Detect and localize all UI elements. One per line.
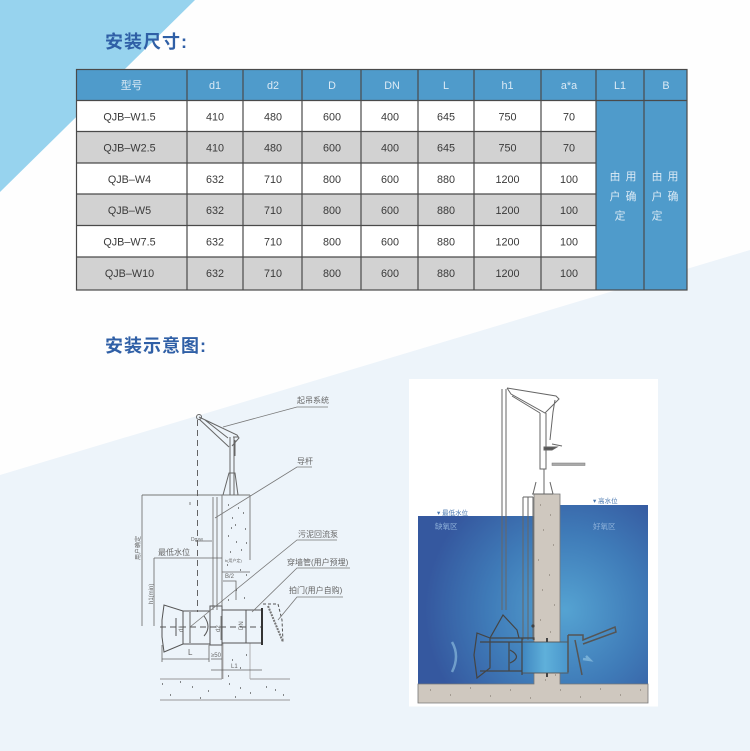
row QJB-W10 xyxy=(105,268,578,280)
row QJB-W5: 632 xyxy=(206,205,224,217)
row QJB-W7.5: 710 xyxy=(264,236,282,248)
row QJB-W2.5 xyxy=(103,142,575,154)
row QJB-W4: 710 xyxy=(264,174,282,186)
table header labels: DN xyxy=(384,80,400,92)
diagram labels: 用户确定 xyxy=(134,536,142,560)
merged cell text L1: 户 xyxy=(610,189,620,203)
merged cell text B: 用 xyxy=(668,171,678,183)
panel: colour installation illustration xyxy=(409,379,658,706)
table header labels: h1 xyxy=(501,80,514,92)
table: installation dimensions xyxy=(76,69,687,290)
flap gate xyxy=(262,604,283,645)
diagram labels: DN xyxy=(239,621,245,630)
row QJB-W5: QJB–W5 xyxy=(108,205,151,217)
water tank left and right xyxy=(418,505,648,684)
row QJB-W1.5: 750 xyxy=(498,112,517,124)
row QJB-W2.5: 600 xyxy=(323,142,341,154)
merged cell text B: 户 xyxy=(652,189,662,203)
row QJB-W4: 632 xyxy=(206,174,224,186)
leader lines xyxy=(190,407,350,627)
table header labels: a*a xyxy=(561,80,577,92)
row QJB-W2.5: 410 xyxy=(206,142,224,154)
merged columns L1 and B xyxy=(596,100,687,290)
water level labels: ▾ 高水位 xyxy=(593,496,618,505)
row QJB-W2.5: QJB–W2.5 xyxy=(103,142,156,154)
crane and guide rails xyxy=(502,388,562,640)
wall bolts xyxy=(546,638,548,677)
dimension lines xyxy=(142,495,262,670)
diagram labels: 拍门(用户自购) xyxy=(289,585,343,595)
row QJB-W4: 1200 xyxy=(495,174,520,186)
table header labels: L1 xyxy=(614,80,626,92)
merged cell text B: 定 xyxy=(652,208,663,222)
row QJB-W7.5: 1200 xyxy=(495,236,520,248)
row QJB-W10: 880 xyxy=(437,268,455,280)
row QJB-W10: QJB–W10 xyxy=(105,268,154,280)
row QJB-W10: 800 xyxy=(323,268,341,280)
row QJB-W2.5: 70 xyxy=(563,142,575,154)
table header background xyxy=(76,69,687,100)
row QJB-W10: 710 xyxy=(264,268,282,280)
diagram labels: L1 xyxy=(231,664,238,670)
discharge pipe through wall xyxy=(522,642,568,673)
diagram labels: 导杆 xyxy=(297,456,313,466)
row QJB-W1.5 xyxy=(103,112,575,124)
table header labels: D xyxy=(328,80,336,92)
row QJB-W1.5: QJB–W1.5 xyxy=(103,112,156,124)
row QJB-W4: 880 xyxy=(437,174,455,186)
diagram labels: d1 xyxy=(179,625,185,632)
table header labels: B xyxy=(662,80,670,92)
table header labels: L xyxy=(443,80,449,92)
concrete wall and floor outlines xyxy=(142,495,290,700)
centre line dashed xyxy=(160,420,262,627)
row QJB-W7.5: 632 xyxy=(206,236,224,248)
merged cell text B: 由 xyxy=(652,169,662,183)
diagram labels: 穿墙管(用户预埋) xyxy=(287,557,349,567)
merged cell text B xyxy=(652,169,678,222)
flap valve xyxy=(568,627,616,675)
concrete wall and floor xyxy=(418,494,648,703)
water level labels: 缺氧区 xyxy=(435,521,458,531)
water level labels xyxy=(435,496,618,531)
row QJB-W2.5: 645 xyxy=(437,142,455,154)
table row backgrounds xyxy=(76,100,596,290)
concrete speckles xyxy=(430,505,641,698)
table header labels: 型号 xyxy=(121,78,142,92)
row QJB-W7.5 xyxy=(103,236,578,248)
diagram labels: 起吊系统 xyxy=(297,395,329,405)
diagram labels: b(用户定) xyxy=(225,557,243,563)
row QJB-W5: 800 xyxy=(323,205,341,217)
row QJB-W4 xyxy=(108,174,578,186)
row QJB-W1.5: 645 xyxy=(437,112,455,124)
row QJB-W5: 1200 xyxy=(495,205,520,217)
diagram labels: B/2 xyxy=(225,574,235,580)
pump in water xyxy=(474,615,534,678)
diagram labels: 最低水位 xyxy=(158,547,190,557)
diagram labels: Dq×e xyxy=(191,537,203,543)
merged cell text L1: 定 xyxy=(615,208,626,222)
row QJB-W10: 600 xyxy=(381,268,399,280)
diagram labels: ≥50 xyxy=(211,653,222,659)
merged cell text L1: 用 xyxy=(626,171,636,183)
row QJB-W1.5: 600 xyxy=(323,112,341,124)
row QJB-W7.5: 100 xyxy=(560,236,578,248)
row QJB-W5: 100 xyxy=(560,205,578,217)
row QJB-W10: 1200 xyxy=(495,268,520,280)
row QJB-W2.5: 750 xyxy=(498,142,517,154)
merged cell text L1 xyxy=(610,169,636,222)
row QJB-W4: 100 xyxy=(560,174,578,186)
diagram: line drawing of pump installation xyxy=(134,395,350,700)
water level labels: 好氧区 xyxy=(593,521,616,531)
row QJB-W4: QJB–W4 xyxy=(108,174,151,186)
background: light blue corner triangle xyxy=(0,0,195,192)
diagram labels: d2 xyxy=(216,625,222,632)
row QJB-W10: 100 xyxy=(560,268,578,280)
row QJB-W5: 710 xyxy=(264,205,282,217)
row QJB-W1.5: 400 xyxy=(381,112,399,124)
merged cell text L1: 确 xyxy=(626,190,636,203)
heading: installation dimensions: 安装尺寸: xyxy=(105,32,188,52)
row QJB-W4: 600 xyxy=(381,174,399,186)
row QJB-W5: 880 xyxy=(437,205,455,217)
water flow highlights xyxy=(452,642,590,672)
water level labels: ▾ 最低水位 xyxy=(437,508,469,517)
row QJB-W5: 600 xyxy=(381,205,399,217)
row QJB-W1.5: 480 xyxy=(264,112,282,124)
row QJB-W7.5: QJB–W7.5 xyxy=(103,236,156,248)
diagram labels: 污泥回流泵 xyxy=(298,529,338,539)
table header labels xyxy=(121,78,670,92)
row QJB-W2.5: 400 xyxy=(381,142,399,154)
row QJB-W5 xyxy=(108,205,578,217)
crane arm xyxy=(196,414,239,495)
merged cell text B: 确 xyxy=(668,190,678,203)
row QJB-W7.5: 600 xyxy=(381,236,399,248)
merged cell text L1: 由 xyxy=(610,169,620,183)
bar beside crane mast xyxy=(552,463,585,466)
background: pale blue lower band xyxy=(0,250,750,751)
row QJB-W7.5: 880 xyxy=(437,236,455,248)
diagram labels: h1(min) xyxy=(149,584,155,604)
table header labels: d1 xyxy=(209,80,221,92)
row QJB-W7.5: 800 xyxy=(323,236,341,248)
pump body xyxy=(162,605,262,652)
row QJB-W2.5: 480 xyxy=(264,142,282,154)
concrete speckles xyxy=(162,505,284,698)
diagram labels xyxy=(134,395,349,670)
diagram labels: L xyxy=(188,648,193,657)
heading: installation diagrams: 安装示意图: xyxy=(105,335,207,356)
table header labels: d2 xyxy=(267,80,279,92)
row QJB-W1.5: 70 xyxy=(563,112,575,124)
row QJB-W1.5: 410 xyxy=(206,112,224,124)
row QJB-W4: 800 xyxy=(323,174,341,186)
row QJB-W10: 632 xyxy=(206,268,224,280)
panel background xyxy=(409,379,658,706)
